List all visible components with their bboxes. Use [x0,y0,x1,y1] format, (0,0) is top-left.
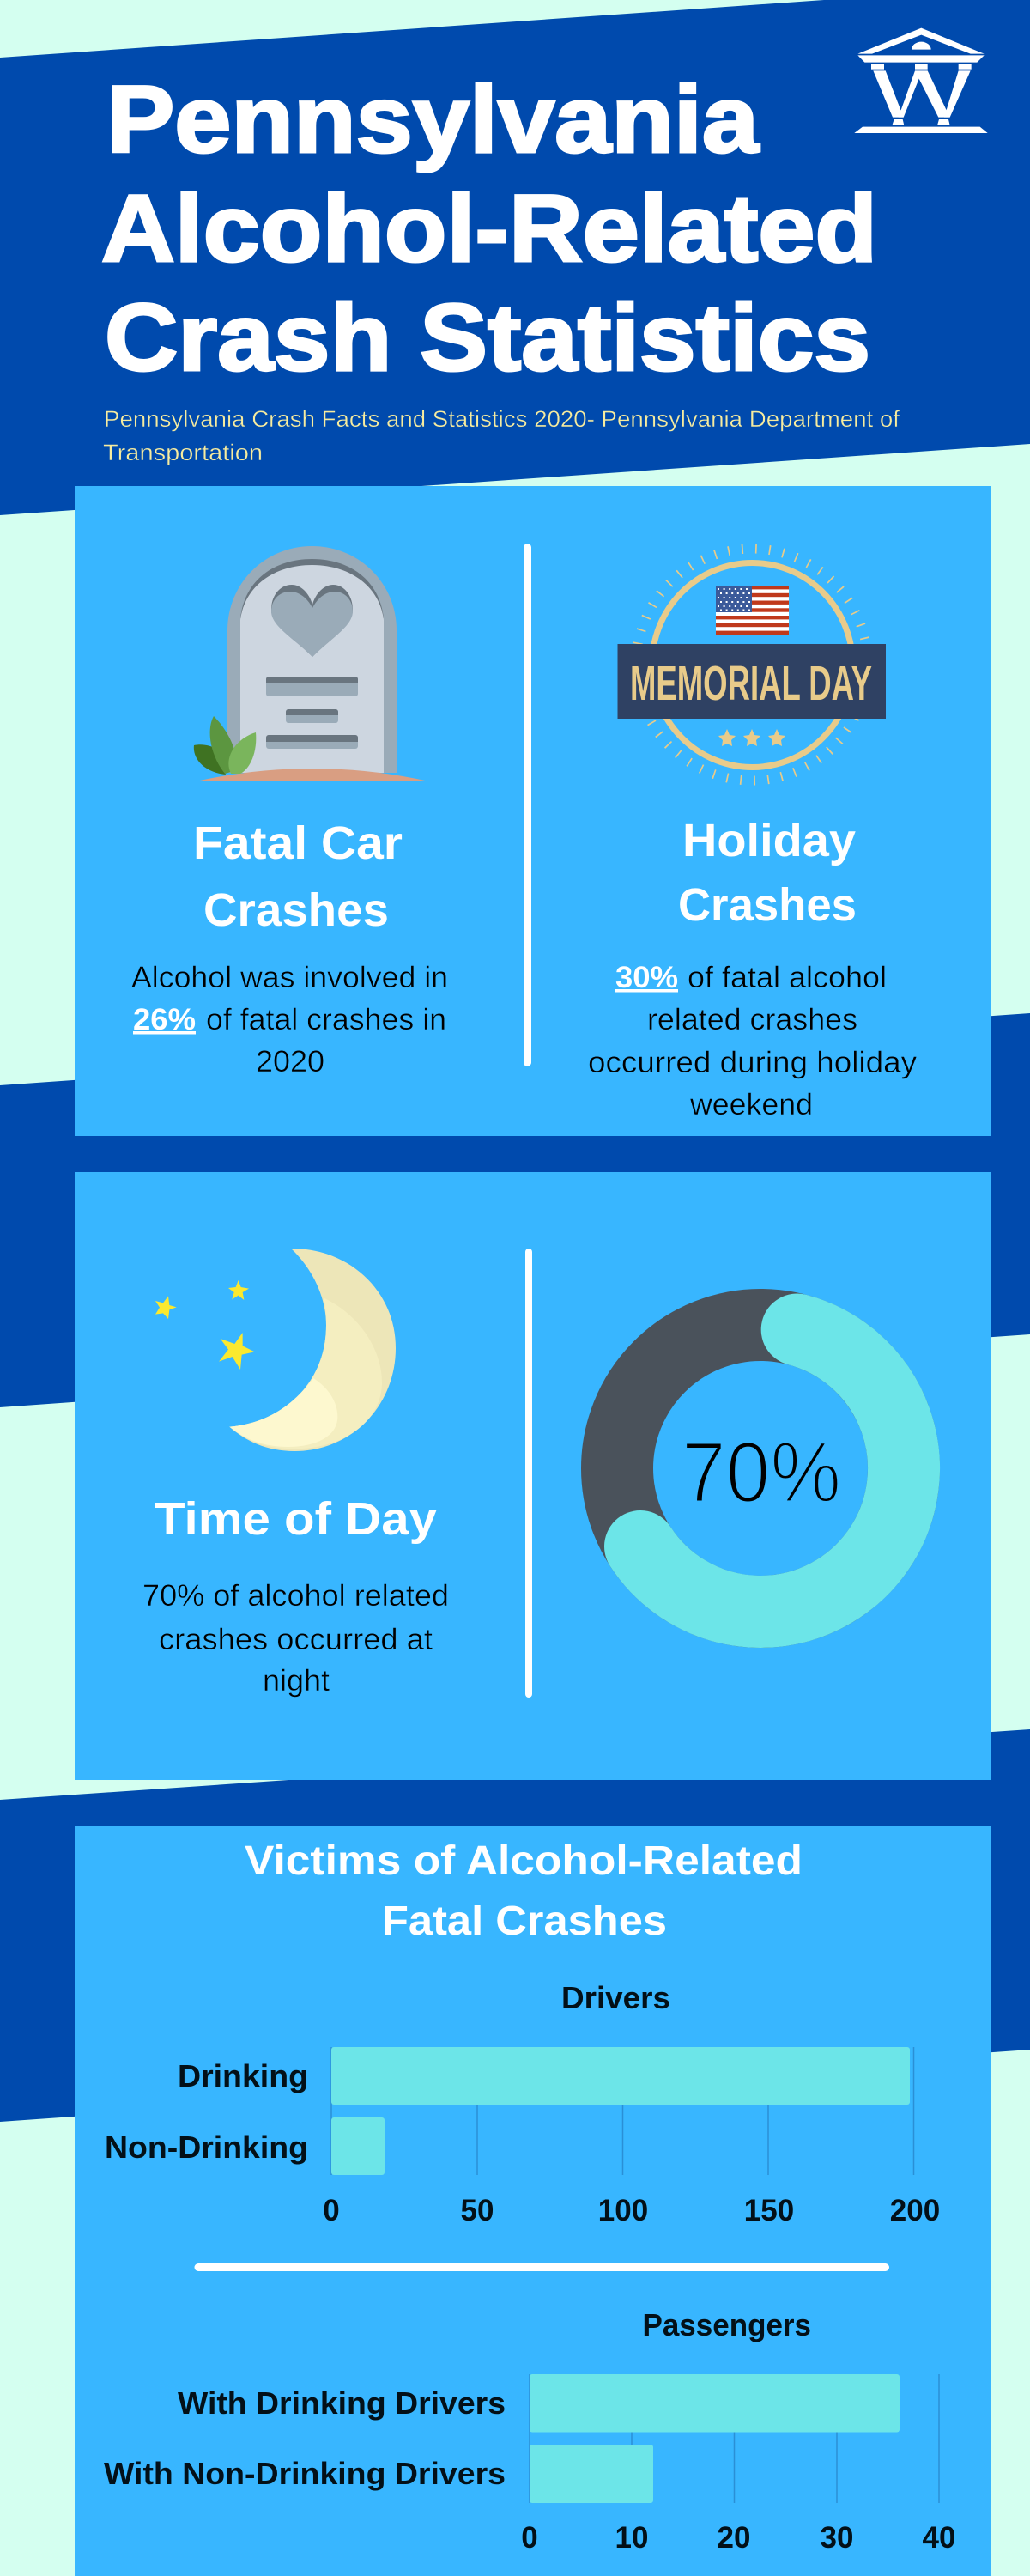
heading: fatal car crashes: Crashes [203,884,389,936]
text: 26 percent statistic: of fatal crashes in [206,1003,446,1036]
text: 26 percent statistic: 26% [133,1003,196,1036]
chart: drivers: 150 [744,2194,794,2227]
chart: drivers: Non-Drinking [105,2129,308,2165]
panel: time of day [75,1172,991,1780]
text: 26 percent statistic [131,961,448,1078]
heading: victims: Fatal Crashes [382,1899,667,1944]
panel: victims of alcohol-related fatal crashes [75,1826,991,2576]
chart: drivers: 0 [323,2194,340,2227]
heading: fatal car crashes: Fatal Car [193,817,403,869]
heading: holiday crashes [678,815,857,931]
heading: time of day: Time of Day [154,1493,437,1545]
chart: drivers: Drivers [561,1980,670,2015]
source subtitle [103,406,900,465]
heading: fatal car crashes [193,817,403,936]
chart: passengers [104,2307,955,2555]
text: 30 percent statistic: weekend [689,1088,813,1121]
chart: drivers: 100 [598,2194,648,2227]
text: 30 percent statistic [588,961,918,1121]
title: Alcohol-Related [101,176,877,282]
chart: drivers: Drinking [178,2058,308,2093]
source subtitle: Pennsylvania Crash Facts and Statistics 2020- Pennsylvania Department of [104,406,900,432]
text: 30 percent statistic: 30% [615,961,678,994]
chart: drivers: 200 [890,2194,940,2227]
text: 30 percent statistic: of fatal alcohol [688,961,887,994]
text: 26 percent statistic: 2020 [256,1045,324,1078]
chart: passengers: 20 [718,2521,750,2555]
chart: passengers: 40 [923,2521,955,2555]
text: 30 percent statistic: occurred during holiday [588,1046,918,1079]
text: night statistic [142,1579,449,1698]
chart: passengers: Passengers [642,2307,811,2342]
icon: memorial day badge: MEMORIAL DAY [630,656,872,711]
icon: law firm logo [854,28,988,133]
panel: fatal and holiday crashes [75,486,991,1136]
text: night statistic: night [263,1664,330,1698]
heading: holiday crashes: Crashes [678,879,857,931]
chart: 70 percent donut [617,1325,904,1612]
source subtitle: Transportation [103,440,263,465]
chart: drivers: 50 [461,2194,494,2227]
icon: tombstone [194,546,429,781]
chart: passengers: 0 [521,2521,538,2555]
text: 26 percent statistic: Alcohol was involved in [131,961,448,994]
chart: passengers: 10 [615,2521,648,2555]
icon: crescent moon and stars [155,1249,396,1451]
chart: passengers: 30 [821,2521,853,2555]
text: night statistic: 70% of alcohol related [142,1579,449,1613]
chart: 70 percent donut: 70% [682,1425,841,1521]
text: 30 percent statistic: related crashes [647,1003,857,1036]
chart: passengers: With Non-Drinking Drivers [104,2456,506,2491]
title: Pennsylvania [106,67,760,173]
text: night statistic: crashes occurred at [159,1623,433,1656]
title: Crash Statistics [105,285,870,391]
icon: memorial day badge [618,549,886,781]
heading: holiday crashes: Holiday [682,815,856,866]
heading: victims: Victims of Alcohol-Related [245,1838,803,1884]
chart: drivers [105,1980,940,2227]
heading: victims [245,1838,803,1944]
chart: passengers: With Drinking Drivers [178,2385,506,2421]
title [101,67,877,391]
